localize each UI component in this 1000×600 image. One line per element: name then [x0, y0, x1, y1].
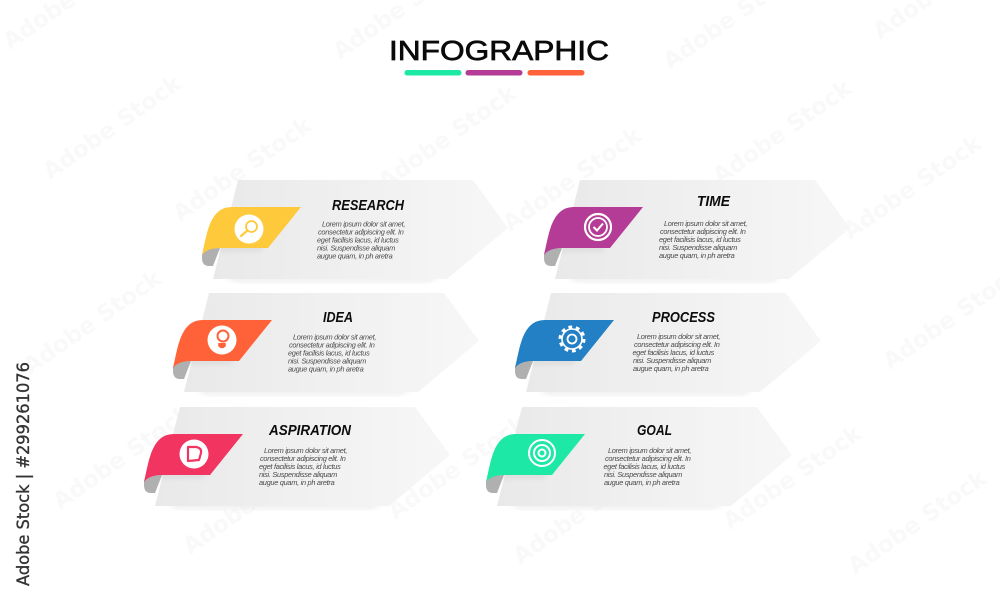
icon: magnifier — [234, 214, 264, 244]
text block: process: Lorem ipsum dolor sit amet, — [637, 332, 720, 341]
panel: process — [515, 293, 821, 395]
background watermark: Adobe Stock pattern: Adobe Stock — [384, 410, 532, 525]
background watermark: Adobe Stock pattern: Adobe Stock — [509, 455, 657, 570]
text block: idea: consectetur adipiscing elit. In — [289, 340, 375, 350]
panel: research — [202, 180, 508, 282]
text block: time: augue quam, in ph aretra — [659, 251, 735, 260]
background watermark: Adobe Stock pattern: Adobe Stock — [39, 70, 187, 185]
background watermark: Adobe Stock pattern: Adobe Stock — [374, 80, 522, 195]
text block: aspiration: Lorem ipsum dolor sit amet, — [264, 446, 347, 455]
text block: goal: eget facilisis lacus, id luctus — [604, 462, 686, 471]
text block: aspiration: consectetur adipiscing elit. In — [260, 454, 346, 463]
text block: goal: augue quam, in ph aretra — [604, 478, 680, 487]
panel: time — [544, 180, 850, 282]
text block: process: augue quam, in ph aretra — [633, 364, 709, 373]
text block: goal: Lorem ipsum dolor sit amet, — [608, 446, 691, 455]
text block: idea: Lorem ipsum dolor sit amet, — [293, 332, 376, 342]
background watermark: Adobe Stock pattern: Adobe Stock — [179, 445, 327, 560]
panel: idea — [173, 293, 479, 395]
heading: aspiration: ASPIRATION — [268, 422, 352, 439]
text block: time: Lorem ipsum dolor sit amet, — [664, 219, 747, 228]
text block: idea: nisi. Suspendisse aliquam — [288, 356, 366, 366]
background watermark: Adobe Stock pattern: Adobe Stock — [709, 75, 857, 190]
text block: time: consectetur adipiscing elit. In — [660, 227, 746, 236]
icon: light bulb — [208, 326, 236, 354]
icon: speech mark — [180, 440, 208, 468]
heading: time: TIME — [697, 193, 731, 210]
text block: idea: augue quam, in ph aretra — [288, 364, 364, 374]
icon: gear — [560, 328, 584, 350]
heading: goal: GOAL — [637, 422, 672, 439]
text block: time: nisi. Suspendisse aliquam — [659, 243, 737, 252]
heading: research: RESEARCH — [332, 197, 405, 214]
icon: check badge — [585, 214, 611, 240]
text block: aspiration: augue quam, in ph aretra — [259, 478, 335, 487]
text block: aspiration: nisi. Suspendisse aliquam — [259, 470, 337, 479]
heading: idea: IDEA — [323, 309, 353, 326]
text block: research: nisi. Suspendisse aliquam — [317, 244, 395, 252]
text block: idea: eget facilisis lacus, id luctus — [288, 348, 370, 358]
panel: aspiration — [144, 407, 450, 509]
text block: research: eget facilisis lacus, id luctus — [317, 236, 399, 244]
background watermark: Adobe Stock pattern: Adobe Stock — [169, 112, 317, 227]
panel: goal — [486, 407, 792, 509]
text block: goal: nisi. Suspendisse aliquam — [604, 470, 682, 479]
text block: research: Lorem ipsum dolor sit amet, — [322, 220, 405, 228]
background watermark: Adobe Stock pattern: Adobe Stock — [499, 122, 647, 237]
background watermark: Adobe Stock pattern: Adobe Stock — [719, 420, 867, 535]
background watermark: Adobe Stock pattern: Adobe Stock — [49, 400, 197, 515]
text block: goal: consectetur adipiscing elit. In — [605, 454, 691, 463]
background watermark: Adobe Stock pattern: Adobe Stock — [19, 265, 167, 380]
icon: target — [529, 440, 555, 466]
text block: aspiration: eget facilisis lacus, id luctus — [259, 462, 341, 471]
title underline bars — [404, 70, 584, 76]
text block: process: nisi. Suspendisse aliquam — [633, 356, 711, 365]
title: INFOGRAPHIC — [389, 35, 609, 66]
background watermark: Adobe Stock pattern: Adobe Stock — [844, 465, 992, 580]
side credit text: Adobe Stock | #299261076 — [14, 362, 33, 586]
text block: research: consectetur adipiscing elit. In — [318, 228, 404, 236]
text block: process: consectetur adipiscing elit. In — [634, 340, 720, 349]
text block: research: augue quam, in ph aretra — [317, 252, 393, 260]
heading: process: PROCESS — [652, 309, 715, 326]
text block: time: eget facilisis lacus, id luctus — [659, 235, 741, 244]
text block: process: eget facilisis lacus, id luctus — [632, 348, 715, 357]
background watermark: Adobe Stock pattern: Adobe Stock — [839, 130, 987, 245]
